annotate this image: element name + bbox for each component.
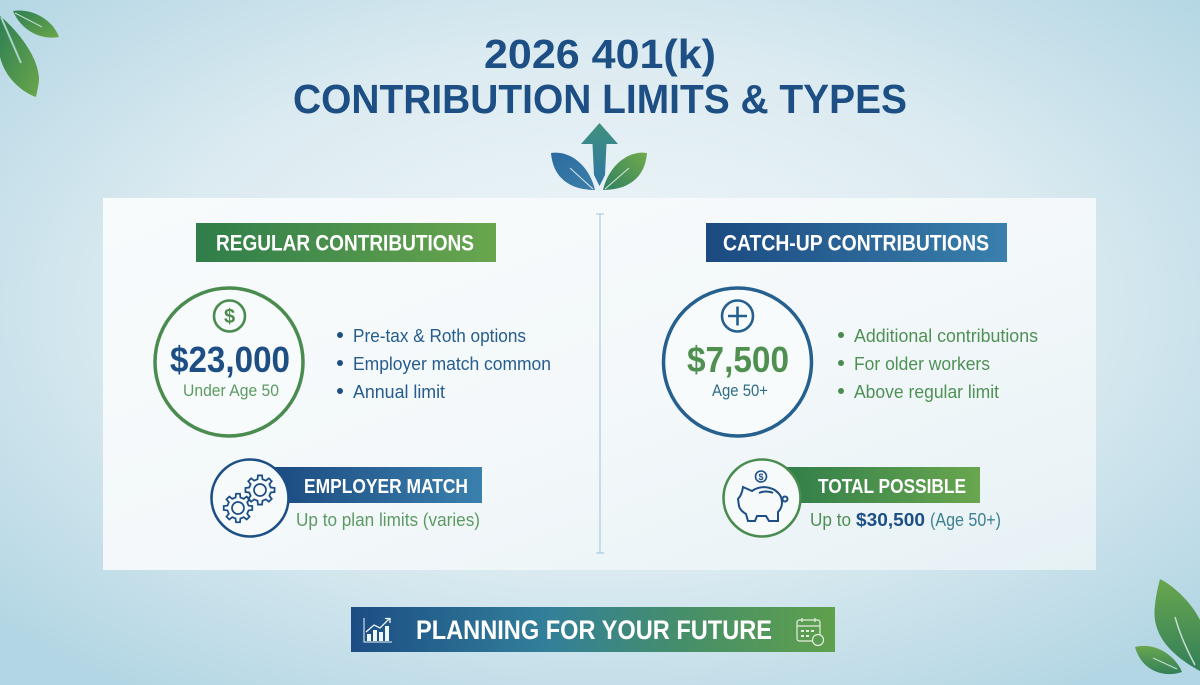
bullet list: catch-up: For older workers xyxy=(854,354,990,374)
bullet list: catch-up: Additional contributions xyxy=(854,326,1038,346)
callout: employer match: Up to plan limits (varies) xyxy=(296,510,480,530)
callout: total possible xyxy=(724,460,1001,536)
footer banner: PLANNING FOR YOUR FUTURE xyxy=(416,615,772,645)
icon: calendar xyxy=(797,618,824,646)
bullet list: regular: Employer match common xyxy=(353,354,551,374)
heading: regular contributions: REGULAR CONTRIBUTIONS xyxy=(216,230,474,256)
callout: total possible: (Age 50+) xyxy=(930,510,1001,530)
icon: plus xyxy=(722,300,753,332)
heading: catch-up contributions xyxy=(706,223,1007,262)
panel: main card xyxy=(103,198,1096,570)
stat circle: $7,500: $7,500 xyxy=(687,339,789,380)
callout: employer match: EMPLOYER MATCH xyxy=(304,476,468,498)
stat circle: $7,500 xyxy=(664,288,812,436)
heading: regular contributions xyxy=(196,223,496,262)
icon: piggy bank: $ xyxy=(758,472,764,482)
title xyxy=(293,31,907,122)
title: CONTRIBUTION LIMITS & TYPES xyxy=(293,76,907,122)
footer banner xyxy=(351,607,835,652)
bullet list: catch-up: Above regular limit xyxy=(854,382,999,402)
icon: gears xyxy=(224,475,275,522)
callout: total possible: $30,500 xyxy=(856,510,925,530)
stat circle: $7,500: Age 50+ xyxy=(712,381,768,400)
divider xyxy=(596,214,604,553)
stat circle: $23,000: Under Age 50 xyxy=(183,381,279,400)
stat circle: $23,000: $23,000 xyxy=(170,339,290,380)
title: 2026 401(k) xyxy=(484,31,716,77)
callout: total possible: TOTAL POSSIBLE xyxy=(818,476,966,498)
bullet list: regular xyxy=(337,326,551,402)
icon: growth chart xyxy=(364,618,392,642)
bullet list: regular: Annual limit xyxy=(353,382,445,402)
panel: catch-up contributions xyxy=(664,223,1038,536)
icon: dollar: $ xyxy=(224,306,235,328)
icon: piggy bank xyxy=(738,471,788,521)
heading: catch-up contributions: CATCH-UP CONTRIBUTIONS xyxy=(723,230,989,256)
callout: total possible: Up to xyxy=(810,510,851,530)
icon: growth arrow with leaves xyxy=(551,123,647,190)
decorative leaves: top left xyxy=(0,10,59,97)
icon: dollar xyxy=(214,300,245,332)
bullet list: regular: Pre-tax & Roth options xyxy=(353,326,526,346)
callout: employer match xyxy=(212,460,482,536)
decorative leaves: bottom right xyxy=(1135,579,1200,674)
bullet list: catch-up xyxy=(838,326,1038,402)
stat circle: $23,000 xyxy=(155,288,303,436)
panel: regular contributions xyxy=(155,223,551,536)
